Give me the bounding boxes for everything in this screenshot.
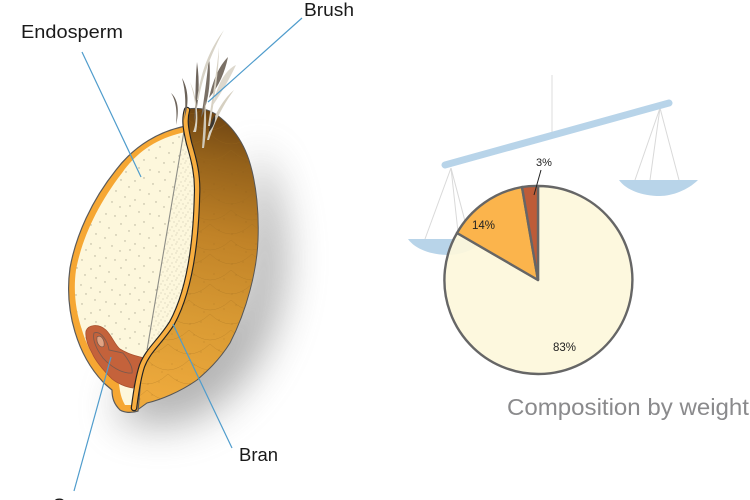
chart title: Composition by weight xyxy=(507,394,750,420)
balance scale xyxy=(408,75,698,255)
pie chart: composition by weight xyxy=(444,186,632,374)
left pan xyxy=(408,239,487,255)
grain drop shadow xyxy=(115,150,285,426)
germ xyxy=(86,326,144,388)
pie label: 83%: 83% xyxy=(553,342,576,354)
bran scale texture xyxy=(134,108,258,411)
right pan xyxy=(619,180,698,196)
orange outer layer of cut half xyxy=(69,126,197,412)
brush hairs xyxy=(171,30,236,148)
slice: 3% germ xyxy=(522,186,538,280)
leader line: bran xyxy=(173,324,232,448)
endosperm dots xyxy=(75,133,184,362)
slice: 14% bran xyxy=(457,187,538,280)
right pan strings xyxy=(635,108,679,180)
label: Endosperm: Endosperm xyxy=(21,21,123,42)
cut line xyxy=(147,131,184,350)
leader line: endosperm xyxy=(82,52,141,177)
leader line: germ xyxy=(74,357,111,491)
scale hanger xyxy=(551,75,553,132)
endosperm cream fill xyxy=(75,132,197,405)
label: Bran: Bran xyxy=(239,444,278,465)
pie label: 3% with pointer xyxy=(534,157,552,195)
leader line: brush xyxy=(208,18,302,102)
pie label: 14%: 14% xyxy=(472,220,495,232)
bran front rim xyxy=(134,110,197,408)
bran shell interior xyxy=(134,108,258,411)
scale beam xyxy=(445,103,669,165)
wheat grain illustration xyxy=(69,30,258,412)
left pan strings xyxy=(425,168,466,239)
pie label: 3% with pointer: 3% xyxy=(536,157,552,169)
fine dots right of cut line xyxy=(147,133,197,350)
slice: 83% endosperm xyxy=(444,186,632,374)
